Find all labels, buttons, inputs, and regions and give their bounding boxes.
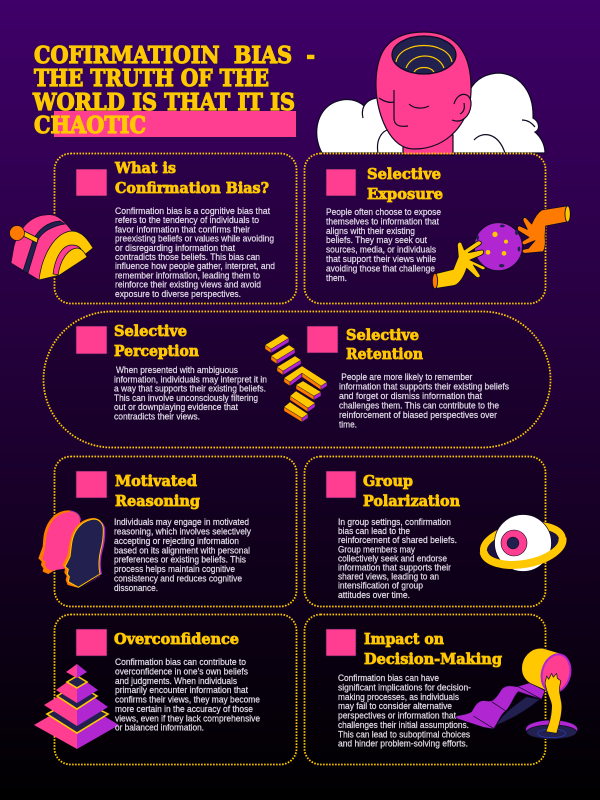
body text: aligns with their existing	[326, 226, 415, 236]
body text: process helps maintain cognitive	[114, 564, 235, 574]
body text: perception	[114, 365, 267, 422]
body text: reinforce their existing views and avoid	[115, 280, 261, 290]
panel: selective exposure	[304, 154, 570, 304]
body text	[115, 657, 260, 733]
body text: based on its alignment with personal	[114, 545, 250, 555]
ball	[474, 223, 522, 271]
heading: Motivated	[115, 472, 197, 490]
orange hand	[517, 206, 570, 253]
body text: and hinder problem-solving efforts.	[338, 739, 468, 749]
body text: Confirmation bias can have	[338, 673, 439, 683]
heading: retention: Selective	[346, 326, 419, 344]
hand and arm	[545, 673, 562, 733]
body text: Group members may	[338, 544, 415, 554]
body text: retention	[339, 372, 509, 429]
body text: Confirmation bias is a cognitive bias that	[115, 206, 270, 216]
body text: This can lead to suboptimal choices	[338, 729, 470, 739]
body text: refers to the tendency of individuals to	[115, 215, 259, 225]
body text: themselves to information that	[326, 216, 439, 226]
body text: retention: People are more likely to remember	[341, 372, 472, 382]
roll opening	[537, 651, 575, 696]
body text: In group settings, confirmation	[338, 517, 451, 527]
body text: information that supports their	[338, 562, 451, 572]
heading: Polarization	[363, 492, 460, 510]
panel: impact on decision-making	[304, 614, 578, 764]
body text: perception: out or downplaying evidence that	[114, 402, 238, 412]
body text: may fail to consider alternative	[338, 701, 452, 711]
heading: retention: Retention	[346, 345, 423, 363]
icon: isometric stairs	[265, 334, 327, 422]
title text: CHAOTIC	[34, 112, 146, 139]
body text: retention: time.	[339, 419, 357, 429]
heading: Group	[363, 472, 413, 490]
portal	[526, 720, 578, 739]
body text: dissonance.	[114, 583, 158, 593]
heading: perception	[114, 322, 199, 360]
body text: views, even if they lack comprehensive	[115, 713, 260, 723]
heading	[115, 472, 200, 510]
body text: them.	[326, 273, 347, 283]
body text: favor information that confirms their	[115, 224, 250, 234]
heading: Exposure	[367, 185, 443, 203]
body text: beliefs. They may seek out	[326, 235, 427, 245]
icon square	[326, 471, 356, 498]
icon square: retention	[307, 326, 338, 353]
body text: significant implications for decision-	[338, 682, 471, 692]
body text: retention: and forget or dismiss information that	[339, 391, 482, 401]
heading	[363, 472, 460, 510]
body text: more certain in the accuracy of those	[115, 704, 253, 714]
body text: collectively seek and endorse	[338, 553, 447, 563]
icon square	[76, 471, 107, 498]
heading: perception: Selective	[114, 322, 187, 340]
body text: retention: challenges them. This can contribute to the	[339, 400, 499, 410]
heading: Decision-Making	[364, 650, 502, 668]
panel: selective perception and retention	[44, 312, 550, 448]
body text: shared views, leading to an	[338, 572, 439, 582]
body text	[338, 517, 457, 600]
icon square	[76, 629, 107, 656]
icon: pyramid	[34, 664, 119, 749]
body text: reasoning, which involves selectively	[114, 526, 251, 536]
body text: reinforcement of shared beliefs.	[338, 535, 457, 545]
title highlight bar	[54, 111, 296, 137]
heading	[114, 159, 269, 197]
heading	[367, 165, 443, 203]
body text: intensification of group	[338, 581, 423, 591]
heading: Impact on	[364, 630, 444, 648]
heading: perception: Perception	[114, 342, 199, 360]
icon: eye planet	[480, 514, 566, 572]
illustration: head with cloud	[317, 32, 545, 155]
body text: remember information, leading them to	[115, 270, 260, 280]
body text: challenges their initial assumptions.	[338, 720, 469, 730]
title text	[32, 42, 315, 139]
body text: overconfidence in one's own beliefs	[115, 666, 248, 676]
icon: hands holding ball	[432, 206, 570, 289]
title text: THE TRUTH OF THE	[34, 65, 269, 92]
heading: Overconfidence	[114, 630, 239, 648]
body text: sources, media, or individuals	[326, 245, 436, 255]
body text: making processes, as individuals	[338, 692, 459, 702]
body text: exposure to diverse perspectives.	[115, 289, 241, 299]
body text: preexisting beliefs or values while avoiding	[115, 234, 274, 244]
body text: bias can lead to the	[338, 526, 410, 536]
body text: or disregarding information that	[115, 243, 235, 253]
body text	[115, 206, 275, 299]
panel: group polarization	[304, 456, 566, 606]
title text: COFIRMATIOIN BIAS -	[34, 42, 315, 69]
heading: Reasoning	[115, 492, 200, 510]
tape roll	[522, 648, 563, 690]
title text: WORLD IS THAT IT IS	[32, 89, 295, 116]
body text: influence how people gather, interpret, and	[115, 261, 275, 271]
body text	[114, 517, 251, 593]
body text: and judgments. When individuals	[115, 676, 237, 686]
icon square	[326, 629, 356, 656]
icon square	[76, 169, 107, 196]
panel: what is confirmation bias	[10, 154, 296, 304]
body text: contradicts those beliefs. This bias can	[115, 252, 260, 262]
heading: Selective	[367, 165, 441, 183]
panel: overconfidence	[34, 614, 296, 764]
body text: perception: When presented with ambiguous	[116, 365, 238, 375]
icon: two head profiles	[38, 510, 105, 589]
icon: tape roll and hand	[456, 648, 578, 739]
heading	[364, 630, 502, 668]
heading: retention	[346, 326, 423, 363]
body text: or balanced information.	[115, 723, 204, 733]
body text: retention: reinforcement of biased perspectives over	[339, 410, 497, 420]
body text: consistency and reduces cognitive	[114, 574, 242, 584]
body text: primarily encounter information that	[115, 685, 248, 695]
body text: Confirmation bias can contribute to	[115, 657, 246, 667]
body text: perspectives or information that	[338, 710, 456, 720]
icon square: perception	[76, 326, 107, 354]
icon: arch	[10, 215, 93, 280]
body text: avoiding those that challenge	[326, 263, 435, 273]
body text: perception: This can involve unconsciously filtering	[114, 393, 258, 403]
body text: attitudes over time.	[338, 590, 410, 600]
body text: perception: contradicts their views.	[114, 412, 200, 422]
body text	[338, 673, 471, 749]
body text: that support their views while	[326, 254, 436, 264]
body text: Individuals may engage in motivated	[114, 517, 249, 527]
ribbon	[456, 683, 545, 729]
body text: perception: information, individuals may interpret it in	[114, 374, 267, 384]
body text: confirms their views, they may become	[115, 694, 260, 704]
heading: What is	[114, 159, 176, 177]
icon square	[326, 169, 356, 196]
yellow hand	[432, 241, 485, 289]
body text: accepting or rejecting information	[114, 536, 239, 546]
body text	[326, 207, 441, 283]
body text: People often choose to expose	[326, 207, 441, 217]
title	[32, 42, 315, 139]
body text: retention: information that supports their existing beliefs	[339, 382, 509, 392]
body text: perception: a way that supports their existing beliefs.	[114, 384, 266, 394]
body text: preferences or existing beliefs. This	[114, 555, 246, 565]
heading: Confirmation Bias?	[115, 179, 269, 197]
panel: motivated reasoning	[38, 456, 297, 606]
